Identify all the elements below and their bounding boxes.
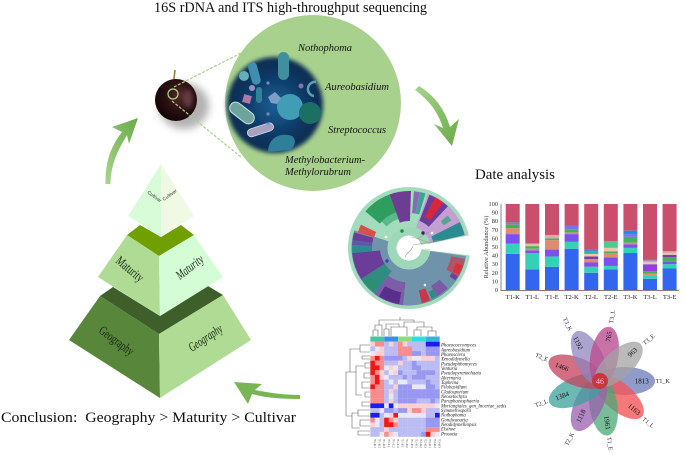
- heatmap row labels: Myriangiales_gen_Incertae_sedis: [440, 404, 506, 409]
- heatmap row labels: Symmetrospora: [441, 409, 472, 414]
- y axis ticks and labels: 80: [492, 218, 498, 225]
- y axis ticks and labels: 20: [492, 270, 498, 277]
- heatmap column labels: T3-K2: [433, 439, 437, 448]
- venn petal counts: 1466: [554, 361, 570, 374]
- heatmap column labels: T3-K1: [428, 439, 432, 448]
- label: Methylobacterium-Methylorubrum: Methylorubrum: [284, 167, 351, 178]
- arrow: pyramid to cherry: [105, 118, 138, 184]
- venn petal counts: [554, 330, 649, 431]
- venn petal counts: 1813: [635, 378, 649, 386]
- arrow: data analysis to conclusion: [234, 382, 300, 404]
- heatmap row labels: [440, 344, 506, 437]
- venn sample labels: T1_L: [641, 417, 655, 430]
- venn petal counts: 765: [604, 330, 614, 343]
- heatmap column labels: T3-K3: [437, 439, 441, 448]
- chart: stacked bar relative abundance: [483, 201, 679, 301]
- heatmap column labels: T1-E3: [410, 439, 414, 448]
- venn sample labels: T2_E: [534, 353, 549, 363]
- venn sample labels: T1_K: [656, 379, 670, 385]
- bar T2-K: [565, 204, 579, 290]
- venn sample labels: T3_L: [609, 309, 617, 324]
- heatmap row labels: Prosotia: [440, 432, 458, 437]
- heatmap column labels: T1-L1: [387, 439, 391, 448]
- bar T3-E: [663, 204, 677, 290]
- heatmap row labels: Neodidymelliopsis: [440, 423, 477, 428]
- venn sample labels: T2_K: [564, 431, 576, 447]
- heatmap row labels: Phaeosclera: [440, 353, 466, 358]
- bar T3-K: [623, 204, 637, 290]
- bar T3-L: [643, 204, 657, 290]
- arrow: microbes to data analysis: [415, 86, 459, 146]
- venn petal counts: 1163: [626, 402, 642, 417]
- heatmap column labels: T1-E1: [401, 439, 405, 448]
- heatmap row labels: Neosetochyta: [440, 395, 467, 400]
- y axis ticks and labels: [489, 201, 498, 294]
- heatmap column labels: T1-K1: [373, 439, 377, 448]
- column dendrogram: [373, 317, 436, 336]
- heatmap row labels: Paraphaeosphaeria: [440, 400, 480, 405]
- y axis ticks and labels: 90: [492, 210, 498, 217]
- tier: cultivar: [128, 164, 194, 237]
- heatmap row labels: Pseudopyrenochaeta: [440, 372, 482, 377]
- chart: circular cladogram: [336, 175, 482, 321]
- tier: geography: Geography: [185, 321, 225, 354]
- heatmap column labels: [373, 439, 441, 448]
- heatmap row labels: Elsinoe: [440, 428, 456, 433]
- heatmap row labels: Pseudopithomyces: [440, 362, 477, 367]
- x axis labels: [506, 294, 676, 301]
- pyramid: [69, 164, 251, 398]
- y axis ticks and labels: 100: [489, 201, 498, 208]
- venn sample labels: T3_E: [642, 333, 657, 347]
- y axis ticks and labels: 30: [492, 261, 498, 268]
- tier: maturity: Maturity: [113, 253, 147, 285]
- x axis labels: T3-L: [643, 294, 657, 301]
- icon: cherry fruit: [155, 70, 209, 129]
- venn sample labels: T1_E: [605, 437, 613, 451]
- tier: geography: [69, 286, 251, 398]
- y axis ticks and labels: 70: [492, 227, 498, 234]
- lower sector blocks: [336, 175, 482, 321]
- venn core count: [592, 373, 608, 389]
- heatmap column labels: T1-L2: [391, 439, 395, 448]
- heatmap cells: [370, 342, 440, 437]
- chart: flower venn diagram: [534, 309, 670, 451]
- venn petal counts: 1961: [602, 415, 612, 431]
- venn petal counts: 1118: [575, 408, 588, 424]
- heatmap row labels: Nothophoma: [440, 414, 466, 419]
- x axis labels: T2-L: [584, 294, 598, 301]
- heatmap row labels: Filobasidium: [440, 386, 467, 391]
- label: Nothophoma: Nothophoma: [297, 43, 352, 54]
- tier: geography: Geography: [96, 322, 137, 359]
- x axis labels: T1-E: [545, 294, 559, 301]
- heatmap row labels: Cladosporium: [441, 390, 469, 395]
- heatmap column labels: T1-L3: [396, 439, 400, 448]
- heatmap column labels: T1-E2: [405, 439, 409, 448]
- label: Streptococcus: Streptococcus: [328, 125, 386, 136]
- bar T1-L: [525, 204, 539, 290]
- x axis labels: T2-K: [564, 294, 579, 301]
- heatmap row labels: Xenodidymella: [440, 358, 470, 363]
- x axis labels: T1-L: [526, 294, 539, 301]
- tier: maturity: [98, 225, 223, 316]
- venn sample labels: [534, 309, 670, 451]
- heatmap row labels: Venturia: [441, 367, 458, 372]
- image: microbes: [227, 52, 323, 153]
- bar T1-K: [506, 204, 520, 290]
- heatmap row labels: Aureobasidium: [440, 348, 471, 353]
- bar T1-E: [545, 204, 559, 290]
- label: Aureobasidium: Aureobasidium: [324, 82, 389, 93]
- y axis ticks and labels: 60: [492, 235, 498, 242]
- heatmap column labels: T1-K3: [382, 439, 386, 448]
- venn sample labels: T2_L: [534, 399, 549, 409]
- x axis labels: T2-E: [604, 294, 618, 301]
- y axis ticks and labels: 0: [495, 287, 498, 294]
- heatmap row labels: Phaeococcomyces: [440, 344, 476, 349]
- heatmap column labels: T1-K2: [378, 439, 382, 448]
- y axis ticks and labels: 10: [492, 278, 498, 285]
- venn petals: [544, 324, 655, 437]
- x axis labels: T1-K: [506, 294, 520, 301]
- heatmap row labels: Alternaria: [440, 376, 462, 381]
- y axis ticks and labels: 40: [492, 253, 498, 260]
- venn core count: 46: [596, 377, 604, 386]
- tier: cultivar: Cultivar: [146, 190, 163, 204]
- venn petal counts: 1384: [554, 390, 571, 402]
- venn sample labels: T3_K: [561, 317, 573, 333]
- heatmap column labels: T2-K3: [424, 439, 428, 448]
- heatmap column labels: T2-K1: [414, 439, 418, 448]
- x axis labels: T3-E: [663, 294, 676, 301]
- y axis title: Relative Abundance (%): [483, 216, 490, 278]
- row dendrogram: [346, 345, 370, 435]
- y axis ticks and labels: 50: [492, 244, 498, 251]
- label: Methylobacterium-Methylorubrum: Methylobacterium-: [284, 155, 365, 166]
- upper sector blocks: [342, 181, 476, 315]
- column group colour bar: [370, 336, 440, 342]
- title: 16S rDNA and ITS high-throughput sequencing: [154, 0, 427, 16]
- conclusion text: Conclusion: Geography > Maturity > Cultivar: [1, 410, 296, 426]
- heading: data analysis: Date analysis: [475, 167, 555, 183]
- tier: cultivar: Cultivar: [162, 188, 179, 203]
- bar T2-E: [604, 204, 618, 290]
- chart: heatmap with dendrograms: [346, 317, 506, 448]
- zoom lines from cherry to circle: [172, 50, 247, 157]
- heatmap row labels: Taphrina: [441, 381, 459, 386]
- venn petal counts: 1192: [571, 335, 585, 351]
- x axis labels: T3-K: [623, 294, 638, 301]
- bar T2-L: [584, 204, 598, 290]
- tier: maturity: Maturity: [172, 251, 206, 283]
- heatmap column labels: T2-K2: [419, 439, 423, 448]
- heatmap row labels: Gondwanaria: [441, 418, 468, 423]
- venn petal counts: 963: [626, 346, 640, 359]
- panel: green microbiome circle: [225, 15, 401, 191]
